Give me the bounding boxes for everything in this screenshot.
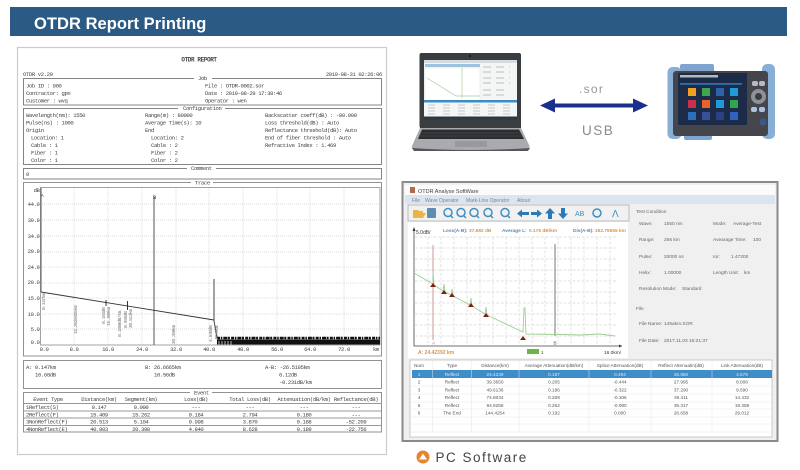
configuration section: Configuration [183, 105, 221, 112]
marker labels: 0.998dB [123, 311, 129, 328]
event table: 2.794 [243, 412, 258, 418]
x axis labels: 64.0 [304, 346, 317, 353]
comment section [24, 165, 382, 179]
event results table: 9.590 [736, 388, 748, 392]
event results table: 0.000 [614, 410, 626, 416]
event results table: 26.950 [674, 372, 689, 377]
panel: PC software window [402, 182, 778, 441]
event table: 5.104 [134, 418, 149, 426]
test condition panel: 1.47200 [731, 254, 749, 260]
job section [24, 75, 382, 105]
test condition panel: 1550 nm [664, 221, 683, 227]
y axis labels: 29.9 [28, 248, 40, 255]
test condition panel: Resolution Mode: [639, 286, 676, 292]
icon: OTDR device [668, 64, 775, 140]
event results table: 19.359 [735, 403, 750, 408]
event results table: 0.205 [548, 380, 560, 384]
configuration section [24, 105, 382, 164]
event table: --- [352, 404, 360, 411]
configuration section: Backscatter coeff(dB) : -80.000 [265, 112, 358, 119]
marker labels: 0.184dB [101, 307, 107, 324]
event table: Event [194, 390, 209, 396]
trace chart: 16.0km/ [604, 350, 622, 356]
test condition panel: Range: [639, 237, 654, 243]
chart readouts: Loss(A-B): [443, 228, 468, 234]
event results table: Link Attenuation(dB) [721, 363, 764, 368]
test condition panel: Standard [682, 286, 702, 292]
toolbar: AB [575, 211, 585, 218]
cursor lines [432, 245, 434, 340]
comment section: Comment [191, 165, 212, 172]
event results table: Reflect [445, 380, 460, 384]
y axis labels: 5.0 [31, 326, 41, 333]
y axis labels: 15.0 [28, 295, 41, 302]
event results table: 26.658 [674, 410, 689, 416]
configuration section: Reflectance threshold(dB): Auto [265, 127, 357, 134]
event results table: Type [447, 363, 457, 368]
header banner [10, 7, 787, 36]
report version and date: OTDR v2.20 [23, 71, 54, 78]
file panel: File Date: [639, 338, 660, 344]
event results table: 144.4254 [485, 410, 505, 416]
marker labels: A [41, 193, 44, 199]
job section: Contractor: gpn [26, 90, 70, 97]
event results table: 94.9258 [487, 403, 504, 408]
y axis labels: 24.9 [28, 264, 40, 271]
event results table: 29.012 [735, 410, 750, 416]
trace chart [24, 180, 382, 356]
laptop keyboard base [412, 128, 530, 151]
file panel: File Name: [639, 321, 662, 327]
configuration section: Range(m) : 80000 [145, 112, 193, 119]
arrow: two-way data transfer [540, 82, 648, 138]
y axis labels: 34.9 [28, 233, 40, 240]
comment section: 0 [26, 171, 30, 178]
event results table: 6 [418, 410, 421, 416]
y axis labels [28, 187, 41, 346]
trace line [41, 188, 380, 345]
event table: Attenuation(dB/km) [277, 396, 331, 403]
cursor readout section: 16.68dB [35, 372, 57, 378]
event results table: 24.4239 [487, 372, 504, 377]
event table: Reflectance(dB) [334, 396, 378, 403]
y axis labels: 39.9 [28, 217, 40, 224]
configuration section: Cable : 1 [31, 142, 59, 149]
toolbar [408, 205, 629, 221]
trace chart: 5.0dB/ [416, 230, 431, 236]
configuration section: Location: 1 [31, 134, 65, 142]
file panel: 2017.11.03 16:21:37 [664, 338, 708, 344]
marker labels: 20.513km [128, 309, 134, 328]
y axis labels: 0.0 [31, 339, 41, 346]
test condition panel: Mode: [713, 221, 726, 227]
laptop screen [424, 60, 517, 120]
event table [24, 390, 382, 433]
event results table: Reflect [445, 403, 460, 408]
marker labels: B [153, 195, 156, 201]
x axis labels: 32.0 [170, 346, 183, 353]
test condition panel: km [744, 270, 750, 276]
event table: 0.184 [189, 412, 204, 418]
test condition panel: Avearage Time: [713, 237, 747, 243]
x axis labels: km [373, 346, 380, 353]
cursor readout section: A-B: -26.5195km [265, 364, 310, 371]
test condition panel: Average-Test [733, 221, 762, 227]
configuration section: Location: 2 [151, 134, 184, 142]
test condition panel: Length Unit: [713, 270, 739, 276]
event table: -22.756 [346, 426, 366, 433]
event table: 20.513 [90, 418, 108, 426]
menu bar: File [412, 198, 420, 204]
test condition panel: Ior: [713, 254, 720, 260]
event results table: 3 [418, 388, 421, 392]
y axis labels: dB [34, 187, 41, 194]
event table: 4.840 [189, 426, 204, 433]
event table: Segment(km) [125, 396, 157, 403]
event table: Total Loss(dB) [229, 396, 271, 403]
cursor readout section: B: 26.6665km [145, 364, 182, 371]
chart readouts: 162.75555 km [595, 228, 626, 234]
test condition panel: Wave: [639, 221, 652, 227]
event table: 0.000 [134, 404, 149, 411]
trace chart: A: 24.42392 km [418, 350, 455, 356]
event table: 0.147 [92, 404, 106, 411]
cursor readout section: A: 0.147km [26, 364, 57, 371]
marker labels: 40.9km [214, 325, 220, 340]
event table: --- [300, 404, 308, 411]
event results table: 36.411 [674, 395, 688, 400]
event table: 40.903 [90, 426, 108, 433]
job section: Job ID : 900 [26, 82, 63, 90]
event results table: 74.8034 [487, 395, 504, 400]
configuration section: Average Time(s): 10 [145, 120, 202, 126]
event table: 2Reflect(F) [26, 412, 59, 418]
configuration section: Loss threshold(dB) : Auto [265, 120, 339, 126]
menu bar: About [517, 198, 531, 204]
configuration section: Pulse(ns) : 1000 [26, 120, 74, 126]
configuration section: Origin [26, 127, 44, 134]
y axis labels: 20.0 [28, 279, 41, 286]
trace chart [408, 222, 628, 358]
event table: Event Type [33, 396, 63, 403]
event results table: Splice Attenuation(dB) [597, 363, 644, 368]
event results table: -0.444 [613, 380, 627, 384]
event results table [410, 360, 772, 437]
event table: 0.180 [297, 412, 312, 418]
configuration section: Wavelength(nm): 1550 [26, 112, 86, 119]
test condition panel: Helix: [639, 270, 651, 276]
event results table: Num [414, 363, 424, 368]
event results table: 27.995 [674, 380, 689, 384]
event results table: Reflect Attenuatin(dB) [658, 363, 704, 368]
chart readouts: Average L: [502, 228, 527, 234]
event results table: The End [443, 410, 461, 416]
event results table: Reflect [445, 395, 460, 400]
file panel: 145akm.SOR [664, 321, 693, 327]
icon: orange circle with triangle [416, 450, 430, 464]
event results table: 2 [418, 380, 421, 384]
event table: 0.189 [297, 426, 311, 433]
event results table: 0.187 [548, 372, 560, 377]
configuration section: Fiber : 1 [31, 150, 59, 156]
test condition panel: 100 [753, 237, 761, 243]
configuration section: Fiber : 2 [151, 150, 178, 156]
x axis labels: 48.0 [237, 346, 250, 353]
event table: 8.628 [243, 426, 257, 433]
event results table: 37.290 [674, 388, 689, 392]
cursor readout section: 10.56dB [154, 372, 176, 378]
event table: 3.870 [243, 418, 258, 426]
event table: 15.262 [132, 412, 150, 418]
toolbar: Λ [612, 209, 619, 220]
event markers [430, 283, 526, 340]
trace chart: B [554, 340, 557, 346]
event table: -52.209 [346, 418, 366, 426]
configuration section: End [145, 127, 154, 134]
event table: 15.409 [90, 412, 108, 418]
marker labels: 0.1880dB/km [117, 310, 123, 337]
caption: PC Software: PC Software [436, 450, 528, 465]
event results table: -0.106 [613, 395, 627, 400]
configuration section: End of fiber threshold : Auto [265, 134, 351, 142]
x axis labels: 72.0 [338, 346, 351, 353]
test condition panel: 1.00000 [664, 270, 682, 276]
event results table: 4.579 [736, 372, 748, 377]
menu bar: Mark-Line Operator [466, 198, 510, 204]
trace chart: A [432, 340, 435, 346]
trace chart: 1 [541, 350, 544, 355]
event results table: Reflect [445, 372, 460, 377]
event results table: -0.322 [613, 388, 627, 392]
x axis labels [40, 346, 380, 353]
menu bar [412, 198, 531, 204]
file panel [636, 306, 708, 344]
event results table: 0.208 [548, 395, 560, 400]
marker labels: 0.147km [41, 293, 47, 310]
chart readouts: 37.682 dB [469, 228, 492, 234]
event table: 20.390 [132, 426, 151, 433]
test condition panel: Pulse: [639, 254, 652, 260]
event table: --- [352, 412, 360, 418]
event results table: 1 [418, 372, 421, 377]
event results table: 0.262 [548, 403, 560, 408]
title: OTDR Report Printing [34, 15, 206, 33]
cursor readout section: 6.12dB [279, 372, 298, 378]
event results table: Reflect [445, 388, 460, 392]
test condition panel: Test Condition [636, 209, 667, 215]
configuration section: Color : 2 [151, 157, 178, 164]
configuration section: Cable : 2 [151, 142, 178, 149]
cursor readout section: -0.231dB/km [279, 379, 313, 386]
trace chart: Trace [195, 180, 210, 186]
event results table: -0.090 [613, 403, 627, 408]
x axis labels: 0.0 [40, 346, 49, 353]
marker labels [41, 193, 220, 344]
event table: 4NonReflect(E) [26, 426, 67, 433]
event table: --- [192, 404, 200, 411]
test condition panel: 20000 ns [664, 254, 684, 260]
event results table: Average Attenuation(dB/km) [525, 363, 584, 368]
event results table: 35.317 [674, 403, 689, 408]
event table: Distance(km) [81, 396, 117, 403]
test condition panel [636, 209, 762, 292]
event table: 0.188 [297, 418, 311, 426]
marker labels: 4.840dB [208, 325, 214, 342]
chart readouts: Dis(A-B): [573, 228, 594, 234]
label: USB: USB [582, 123, 614, 138]
report version and date [23, 71, 382, 78]
event table: 3NonReflect(F) [26, 418, 67, 426]
configuration section: Color : 1 [31, 157, 59, 164]
event results table: 14.432 [735, 395, 750, 400]
marker labels: 15.2620485km [73, 305, 79, 334]
x axis labels: 16.0 [102, 346, 115, 353]
job section: Job [198, 75, 207, 82]
test condition panel: 256 km [664, 237, 680, 243]
job section: File : OTDR-0002.sor [205, 82, 264, 90]
event results table: 4 [418, 395, 421, 400]
chart readouts: 0.176 dB/km [529, 228, 557, 234]
x axis labels: 8.0 [70, 346, 79, 353]
job section: Date : 2019-08-29 17:38:46 [205, 90, 282, 97]
device screen [678, 73, 747, 125]
x axis labels: 56.0 [271, 346, 284, 353]
report title: OTDR REPORT [181, 56, 217, 64]
chart readouts [443, 228, 626, 234]
device controls [751, 81, 766, 126]
label: sor file: .sor [579, 82, 604, 96]
event table: 0.998 [189, 418, 203, 426]
job section: Customer : wvq [26, 98, 67, 104]
event results table: 0.196 [548, 388, 560, 392]
y axis labels: 44.9 [28, 201, 40, 208]
event results table: 8.008 [736, 380, 748, 384]
event results table: 0.494 [614, 372, 626, 377]
report version and date: 2019-08-31 02:26:06 [326, 71, 382, 78]
event results table: 5 [418, 403, 421, 408]
x axis labels: 40.0 [203, 346, 216, 353]
event table: 1Reflect(S) [26, 404, 59, 411]
window title [410, 187, 479, 195]
marker labels: 20.390km [171, 325, 177, 344]
event results table: 49.6136 [487, 388, 504, 392]
file panel: File [636, 306, 644, 312]
event results table: 0.192 [548, 410, 560, 416]
marker labels: 15.409km [106, 307, 112, 326]
event results table: Distance(km) [481, 363, 509, 368]
event table: --- [246, 404, 254, 411]
panel: OTDR printed report [18, 48, 386, 454]
trace line [414, 272, 615, 336]
event table: Loss(dB) [184, 396, 208, 403]
configuration section: Refractive Index : 1.469 [265, 142, 336, 149]
y axis labels: 10.0 [28, 311, 41, 318]
icon: laptop [412, 53, 530, 151]
menu bar: Wave Operator [425, 198, 459, 204]
window title: OTDR Analyse SoftWare [418, 189, 479, 195]
event results table: 39.3650 [487, 380, 504, 384]
job section: Operator : wen [205, 98, 246, 104]
cursor readout section [24, 360, 382, 388]
x axis labels: 24.0 [136, 346, 149, 353]
